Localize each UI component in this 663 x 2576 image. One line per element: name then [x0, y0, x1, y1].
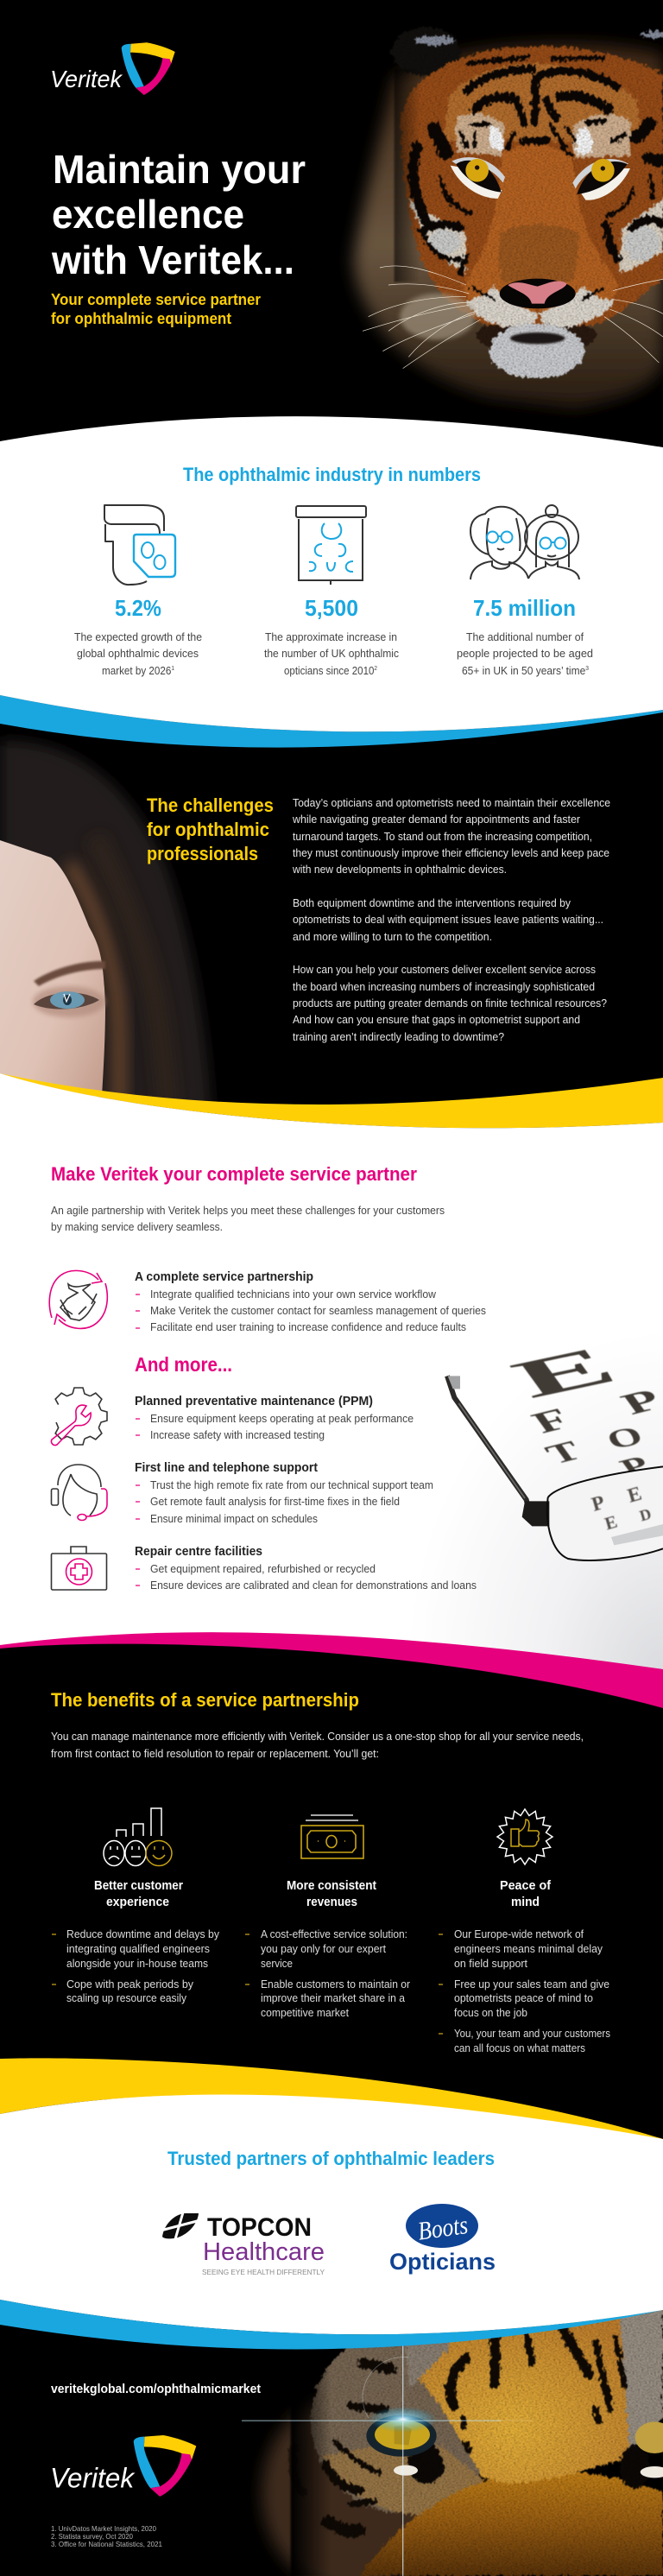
icon: older couple [470, 505, 579, 579]
text block: intro [51, 1205, 445, 1233]
text block: challenges body: the board when increasing numbers of increasingly sophisticated [293, 981, 595, 993]
heading: industry in numbers: The ophthalmic industry in numbers [183, 464, 481, 485]
column: more consistent revenues: More consistent [287, 1879, 376, 1893]
stat: 7.5 million: 3 [585, 666, 589, 672]
column: better customer experience: experience [106, 1896, 169, 1909]
heading: challenges: for ophthalmic [147, 819, 269, 840]
heading: challenges: professionals [147, 843, 258, 864]
stat: 7.5 million: The additional number of [466, 631, 584, 643]
icon: headset [52, 1465, 107, 1520]
text block: challenges body: Both equipment downtime and the interventions required by [293, 897, 571, 909]
stat: 5.2%: 5.2% [115, 595, 161, 621]
panel: industry numbers [0, 416, 663, 748]
text block: challenges body: Today’s opticians and optometrists need to maintain their excellence [293, 797, 610, 809]
column: peace of mind [439, 1879, 610, 2054]
column: peace of mind: Free up your sales team and give [454, 1978, 609, 1991]
title: Maintain your [53, 147, 306, 192]
column: more consistent revenues [245, 1879, 410, 2019]
item: complete service partnership: Make Veritek the customer contact for seamless management of queries [150, 1305, 486, 1317]
column: more consistent revenues: revenues [306, 1896, 357, 1909]
panel: benefits [0, 1632, 663, 2073]
text block: challenges body: and more willing to turn to the competition. [293, 931, 492, 943]
logo: Veritek footer: Veritek [50, 2461, 136, 2493]
icon: banknote [301, 1815, 363, 1858]
title [51, 147, 306, 282]
text block: benefits intro: You can manage maintenance more efficiently with Veritek. Consider us a one-stop shop for all your service needs, [51, 1731, 584, 1743]
item: first line support: Trust the high remote fix rate from our technical support team [150, 1479, 433, 1491]
stat: 5,500: the number of UK ophthalmic [264, 648, 399, 660]
column: more consistent revenues: service [261, 1958, 293, 1970]
subtitle [51, 291, 261, 327]
logo: Veritek footer [50, 2435, 196, 2497]
image: eye chart and glasses: F [525, 1402, 578, 1440]
subtitle: Your complete service partner [51, 291, 261, 308]
footnotes: 3. Office for National Statistics, 2021 [51, 2540, 162, 2548]
image: eye chart and glasses: E [499, 1336, 628, 1409]
hero panel [50, 28, 663, 408]
text block: challenges body: How can you help your customers deliver excellent service across [293, 964, 596, 976]
logo: Topcon Healthcare: TOPCON [207, 2213, 312, 2242]
image: eye chart and glasses: P [589, 1491, 607, 1516]
item: repair centre [135, 1544, 477, 1592]
logo: Veritek: Veritek [50, 66, 123, 92]
stat: 7.5 million [457, 595, 593, 677]
footnotes: 2. Statista survey, Oct 2020 [51, 2532, 133, 2541]
footer text [50, 2383, 261, 2548]
image: eye chart and glasses: D [638, 1505, 654, 1525]
text block: challenges body: products are putting greater demands on finite technical resources? [293, 997, 607, 1010]
panel: service partner [0, 1073, 663, 1718]
stat: 5,500: 2 [374, 666, 377, 672]
image: woman's face [0, 741, 212, 1114]
column: more consistent revenues: you pay only for our expert [261, 1943, 387, 1955]
column: better customer experience: Better customer [94, 1879, 183, 1893]
column: peace of mind: Peace of [500, 1879, 551, 1893]
panel: challenges image [0, 741, 212, 1114]
panel: trusted partners [0, 2058, 663, 2349]
image: eye chart and glasses [447, 1336, 663, 1560]
text block: benefits intro [51, 1731, 584, 1760]
item: first line support [135, 1460, 433, 1525]
text block: intro: An agile partnership with Veritek helps you meet these challenges for your customers [51, 1205, 445, 1217]
column: peace of mind: focus on the job [454, 2007, 527, 2019]
footnotes: 1. UnivDatos Market Insights, 2020 [51, 2524, 156, 2533]
text block: challenges body: turnaround targets. To stand out from the increasing competition, [293, 831, 592, 843]
column: better customer experience [52, 1879, 220, 2004]
band: yellow swoosh lower [0, 2058, 663, 2141]
stat: 5.2%: 1 [171, 666, 174, 672]
column: more consistent revenues: improve their market share in a [261, 1992, 405, 2004]
panel: footer tiger [242, 2303, 663, 2576]
text block: benefits intro: from first contact to field resolution to repair or replacement. You’ll get: [51, 1748, 379, 1760]
image: eye chart and glasses: T [540, 1435, 588, 1470]
text block: challenges body: optometrists to deal with equipment issues leave patients waiting... [293, 914, 603, 926]
column: more consistent revenues: A cost-effective service solution: [261, 1928, 407, 1940]
title: with Veritek... [51, 237, 294, 282]
stat: 7.5 million: people projected to be aged [457, 648, 593, 660]
item: complete service partnership: Facilitate end user training to increase confidence and reduce faults [150, 1321, 466, 1333]
stat: 5,500: The approximate increase in [265, 631, 397, 643]
logo: Topcon Healthcare: Healthcare [203, 2238, 325, 2266]
panel background: white [0, 2095, 663, 2334]
column: peace of mind: Our Europe-wide network of [454, 1928, 584, 1940]
heading: complete service partner: Make Veritek your complete service partner [51, 1163, 417, 1185]
text block: challenges body: And how can you ensure that gaps in optometrist support and [293, 1014, 580, 1026]
icon: head with lens [104, 505, 175, 585]
logo: Boots Opticians [389, 2204, 496, 2275]
column: peace of mind: You, your team and your customers [454, 2028, 610, 2040]
band: magenta swoosh [0, 1632, 663, 1727]
text block: challenges body: they must continuously improve their efficiency levels and keep pace [293, 847, 609, 859]
column: better customer experience: Cope with peak periods by [66, 1978, 194, 1991]
column: better customer experience: scaling up resource easily [66, 1992, 187, 2004]
heading: challenges [147, 794, 274, 864]
column: peace of mind: on field support [454, 1958, 528, 1970]
icon: gear and wrench [50, 1388, 107, 1446]
stat: 5.2%: market by 2026 [102, 665, 176, 677]
panel background: black [0, 1644, 663, 2073]
column: better customer experience: Reduce downtime and delays by [66, 1928, 220, 1940]
logo: Boots Opticians: Boots [416, 2211, 470, 2246]
column: more consistent revenues: Enable customers to maintain or [261, 1978, 410, 1991]
item: PPM: Ensure equipment keeps operating at peak performance [150, 1413, 414, 1425]
stat: 5,500: 5,500 [305, 595, 358, 621]
heading: benefits: The benefits of a service partnership [51, 1689, 359, 1711]
item: complete service partnership [135, 1269, 486, 1333]
image: eye chart and glasses: E [625, 1482, 644, 1508]
column: more consistent revenues: competitive market [261, 2007, 350, 2019]
item: repair centre: Ensure devices are calibrated and clean for demonstrations and loans [150, 1579, 477, 1592]
column: peace of mind: mind [511, 1896, 540, 1909]
item: first line support: Get remote fault analysis for first-time fixes in the field [150, 1496, 400, 1508]
heading: trusted partners: Trusted partners of ophthalmic leaders [167, 2148, 495, 2169]
logo: Topcon Healthcare [161, 2212, 325, 2276]
item: complete service partnership: Integrate qualified technicians into your own service workflow [150, 1288, 437, 1301]
subtitle: for ophthalmic equipment [51, 310, 231, 327]
item: repair centre: Repair centre facilities [135, 1544, 262, 1559]
link: website: veritekglobal.com/ophthalmicmarket [51, 2383, 261, 2396]
item: complete service partnership: A complete service partnership [135, 1269, 313, 1284]
image: tiger face [354, 28, 663, 408]
item: PPM [135, 1394, 414, 1441]
stat: 5.2% [74, 595, 202, 677]
icon: eye chart [296, 506, 366, 585]
logo: Topcon Healthcare: SEEING EYE HEALTH DIFFERENTLY [202, 2268, 325, 2276]
stat: 5.2%: The expected growth of the [74, 631, 202, 643]
panel background: white [0, 1073, 663, 1718]
panel background: white arc [0, 416, 663, 731]
text block: challenges body: with new developments in ophthalmic devices. [292, 864, 507, 876]
heading: challenges: The challenges [147, 794, 274, 816]
background haze [406, 1330, 663, 1675]
stat: 7.5 million: 7.5 million [473, 595, 576, 621]
column: better customer experience: integrating qualified engineers [66, 1943, 210, 1955]
icon: handshake [49, 1270, 107, 1328]
image: eye chart and glasses: E [603, 1513, 620, 1534]
footnotes [51, 2524, 162, 2548]
band: blue swoosh [0, 695, 663, 748]
item: PPM: Increase safety with increased testing [150, 1429, 325, 1441]
stat: 5,500: opticians since 2010 [284, 665, 382, 677]
column: peace of mind: engineers means minimal delay [454, 1943, 603, 1955]
band: yellow swoosh [0, 1073, 663, 1128]
icon: customer satisfaction [104, 1808, 172, 1865]
text block: challenges body: training aren’t indirectly leading to downtime? [293, 1031, 504, 1043]
item: repair centre: Get equipment repaired, refurbished or recycled [150, 1563, 376, 1575]
text block: challenges body [292, 797, 610, 1043]
text block: challenges body: while navigating greater demand for appointments and faster [292, 813, 580, 826]
column: peace of mind: can all focus on what matters [454, 2042, 585, 2054]
logo: Veritek [50, 42, 175, 95]
column: better customer experience: alongside your in-house teams [66, 1958, 208, 1970]
logo: Boots Opticians: Opticians [389, 2249, 496, 2275]
image: eye chart and glasses: O [602, 1421, 648, 1455]
item: PPM: Planned preventative maintenance (PPM) [135, 1394, 373, 1408]
item: first line support: Ensure minimal impact on schedules [150, 1513, 318, 1525]
icon: thumbs up badge [497, 1809, 552, 1864]
column: peace of mind: optometrists peace of mind to [454, 1992, 593, 2004]
icon: repair case [52, 1547, 107, 1590]
band: blue swoosh lower [0, 2300, 663, 2349]
stat: 5,500 [264, 595, 399, 677]
stat: 5.2%: global ophthalmic devices [77, 648, 199, 660]
title: excellence [52, 192, 244, 237]
heading: and more: And more... [135, 1353, 232, 1376]
item: first line support: First line and telephone support [135, 1460, 318, 1475]
image: eye chart and glasses: P [614, 1451, 656, 1482]
text block: intro: by making service delivery seamless. [51, 1221, 223, 1233]
stat: 7.5 million: 65+ in UK in 50 years’ time [462, 665, 590, 677]
